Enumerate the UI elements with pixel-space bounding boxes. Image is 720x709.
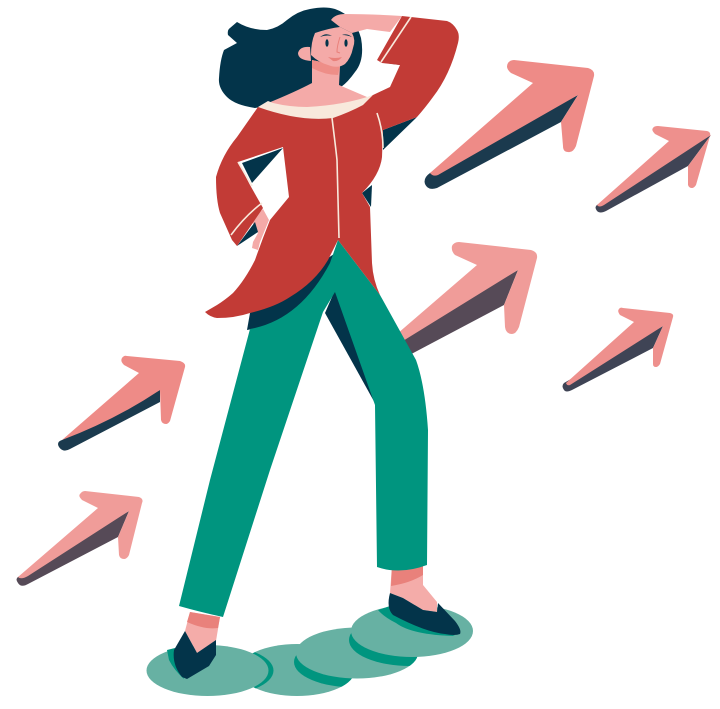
arm shadow [383,117,417,150]
collar [258,95,373,119]
stepping stones [146,605,473,696]
figure: woman [174,8,460,679]
shoe left [174,631,216,679]
arrow: middle behind figure [390,242,537,360]
arrow: large top [425,60,594,189]
arrow: top right [596,126,711,212]
neck [268,60,373,115]
arrow: left lower [16,491,143,586]
left ankle [185,612,220,653]
jacket [205,16,459,318]
pants [179,240,428,617]
hip hand [251,209,269,250]
arrow: left upper [58,356,185,451]
hand on head [331,14,402,33]
hair [219,8,362,108]
eyes and brows [320,34,352,47]
nose [337,37,340,53]
ear [298,47,311,61]
face [311,27,354,67]
arrow: middle right [562,308,673,392]
mouth [328,57,342,61]
right ankle [390,565,437,612]
shoe right [389,593,460,635]
hip and waist shadows [242,148,283,183]
sleeve cuff lines and seams [231,17,411,238]
dark shadows behind pants [247,250,340,330]
